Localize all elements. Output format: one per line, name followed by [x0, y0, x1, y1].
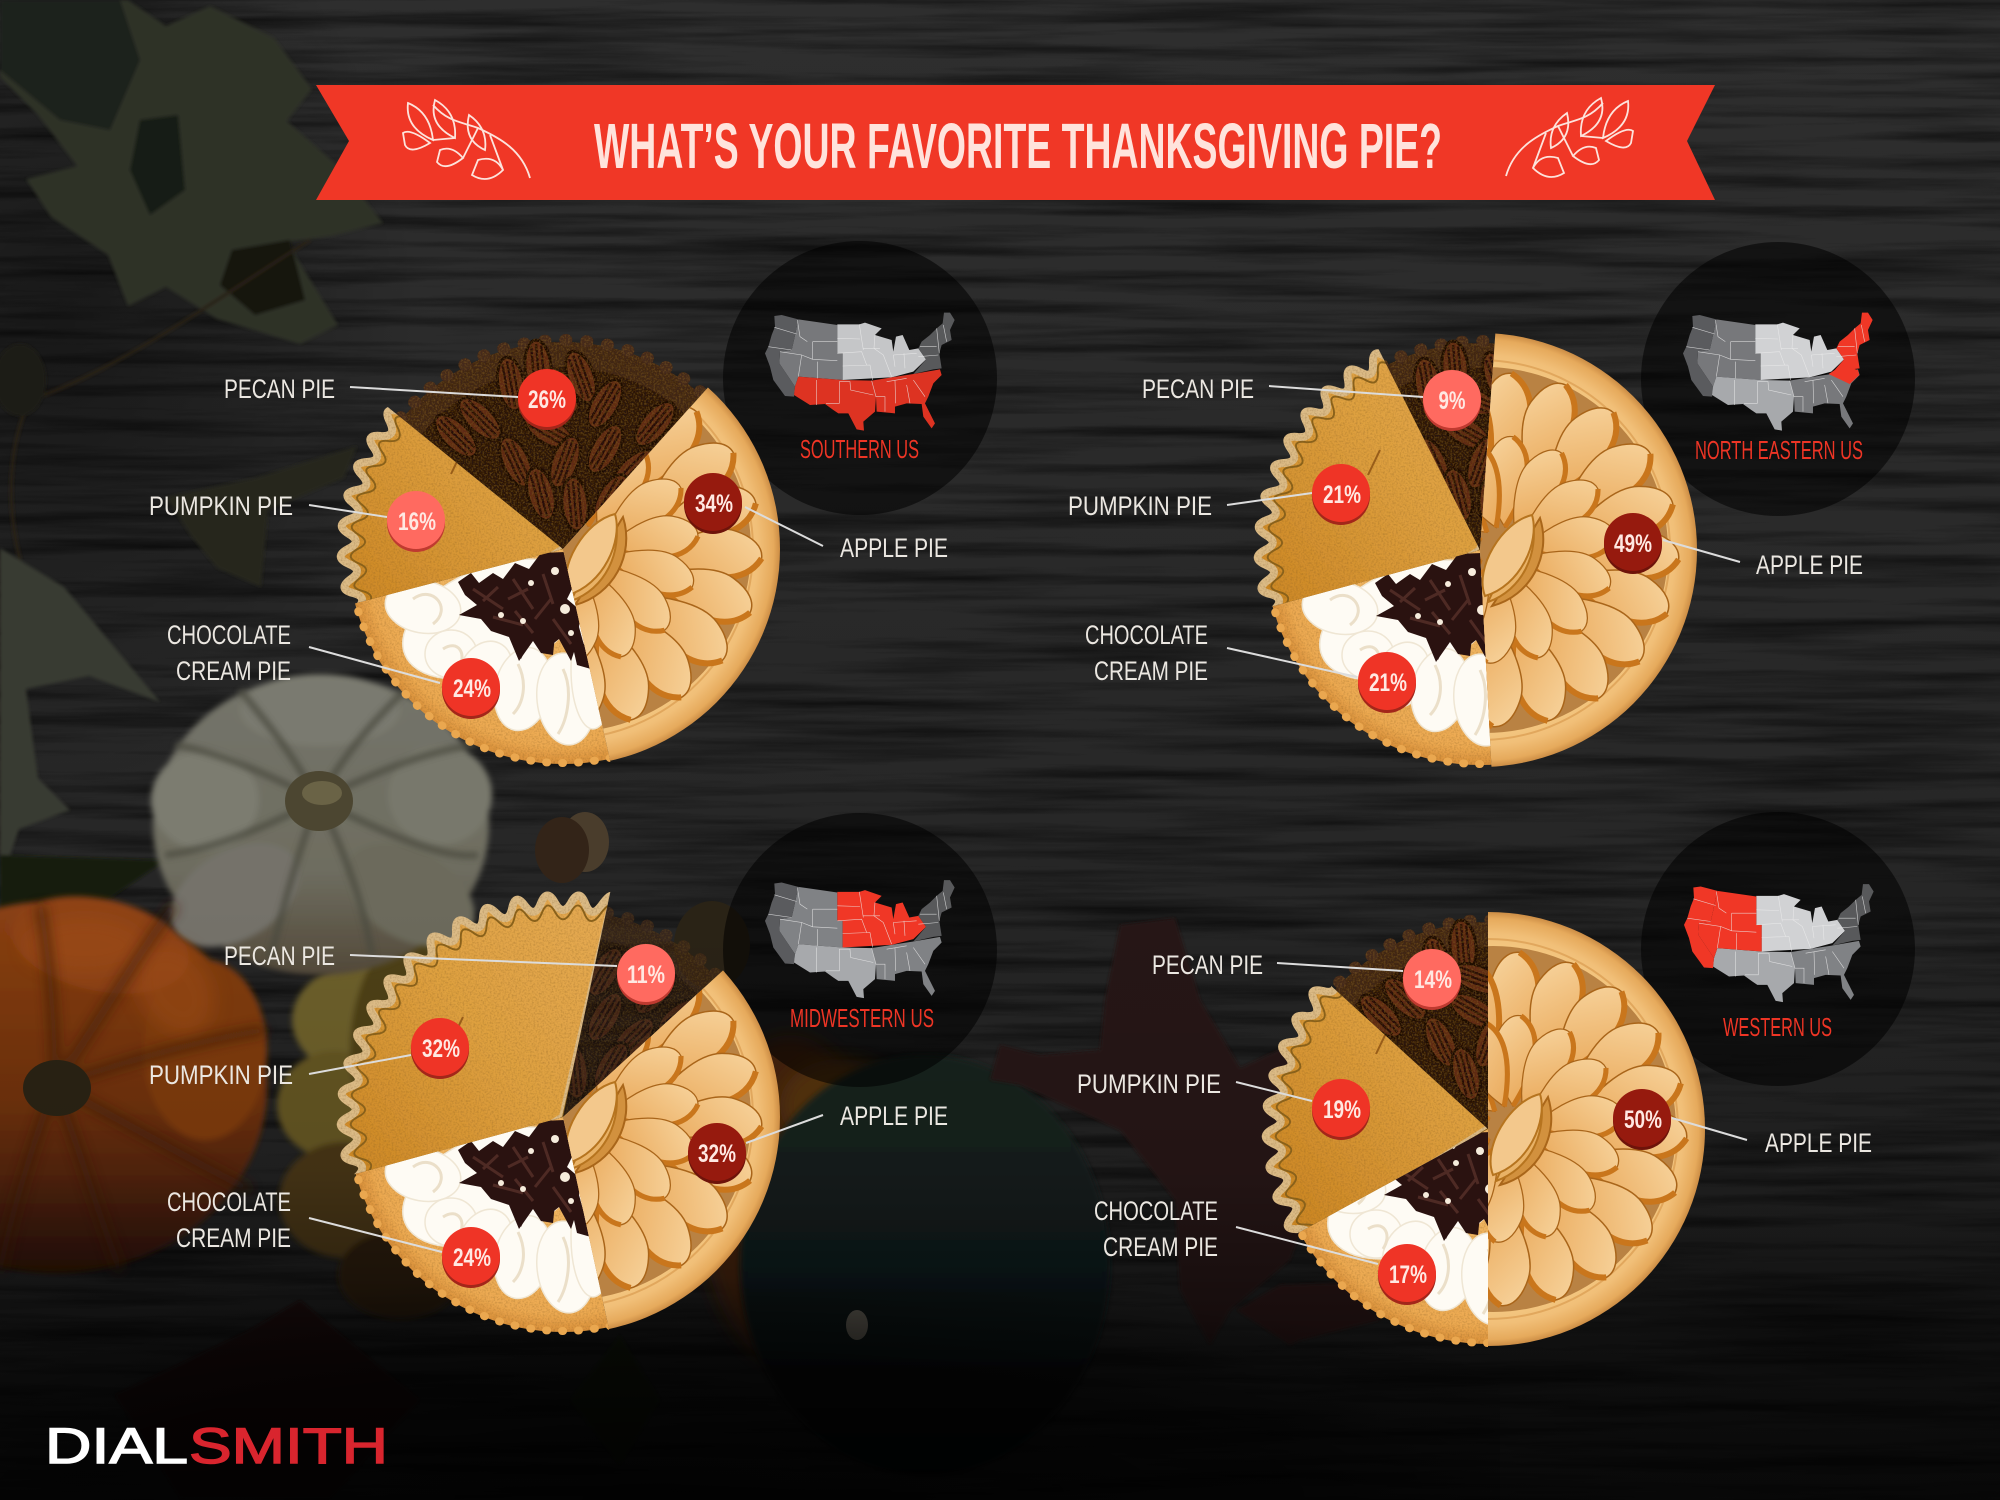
label: pumpkin pie 19%: 19%	[1323, 1096, 1361, 1124]
label: pumpkin pie 32%	[149, 1018, 469, 1090]
label: pumpkin pie 21%	[1068, 464, 1370, 525]
label: chocolate cream pie 17%: 17%	[1389, 1261, 1427, 1289]
label: chocolate cream pie 24%: CHOCOLATE	[167, 1187, 291, 1217]
pie chart: western US	[1266, 908, 1705, 1346]
label: pecan pie 9%	[1142, 370, 1481, 431]
label: apple pie 34%: 34%	[695, 490, 733, 518]
label: pecan pie 26%	[224, 369, 576, 430]
label: pecan pie 11%: PECAN PIE	[224, 941, 335, 971]
label: pecan pie 9%: 9%	[1438, 387, 1466, 415]
label: chocolate cream pie 24%	[167, 620, 500, 719]
label: pecan pie 14%: PECAN PIE	[1152, 950, 1263, 980]
pie chart: southern US	[341, 328, 780, 766]
decoration: orange pumpkin	[0, 881, 267, 1273]
decoration: yellow squash	[277, 930, 490, 1319]
logo: Dialsmith	[45, 1418, 388, 1474]
label: pecan pie 9%: PECAN PIE	[1142, 374, 1254, 404]
label: apple pie 49%: 49%	[1614, 530, 1652, 558]
decoration: acorn squash	[700, 1035, 1110, 1475]
label: pecan pie 14%: 14%	[1414, 966, 1452, 994]
map badge: southern US	[723, 241, 997, 515]
vignette: bottom fade	[0, 900, 2000, 1500]
label: apple pie 50%	[1613, 1089, 1872, 1158]
map badge: north eastern US	[1641, 242, 1915, 516]
map badge: north eastern US: NORTH EASTERN US	[1695, 435, 1863, 465]
title banner	[316, 85, 1715, 200]
label: apple pie 34%: APPLE PIE	[840, 533, 948, 563]
label: apple pie 32%: 32%	[698, 1140, 736, 1168]
decoration: dim gourd behind map	[674, 901, 750, 989]
decoration: white pumpkin	[151, 674, 493, 975]
label: chocolate cream pie 21%: CHOCOLATE	[1085, 620, 1208, 650]
label: pumpkin pie 32%: 32%	[422, 1035, 460, 1063]
map badge: western US	[1641, 812, 1915, 1086]
map badge: southern US: SOUTHERN US	[800, 434, 919, 464]
map badge: western US: WESTERN US	[1723, 1012, 1832, 1042]
label: chocolate cream pie 24%: 24%	[453, 675, 491, 703]
icon: right sprig	[1506, 98, 1633, 177]
map badge: midwestern US	[723, 813, 997, 1087]
label: pecan pie 11%	[224, 941, 675, 1005]
label: apple pie 50%: APPLE PIE	[1765, 1128, 1872, 1158]
label: pumpkin pie 16%	[149, 491, 445, 552]
label: chocolate cream pie 24%: 24%	[453, 1244, 491, 1272]
label: chocolate cream pie 17%: CREAM PIE	[1103, 1232, 1218, 1262]
map badge: midwestern US: MIDWESTERN US	[790, 1003, 934, 1033]
label: pumpkin pie 21%: PUMPKIN PIE	[1068, 491, 1212, 521]
logo: Dialsmith: SMITH	[189, 1418, 388, 1474]
decoration: acorn	[535, 812, 609, 883]
label: chocolate cream pie 24%: CHOCOLATE	[167, 620, 291, 650]
label: pecan pie 26%: PECAN PIE	[224, 374, 335, 404]
logo: Dialsmith: DIAL	[45, 1418, 188, 1474]
panel: midwestern US	[149, 813, 997, 1334]
label: chocolate cream pie 21%	[1085, 620, 1416, 713]
label: chocolate cream pie 24%: CREAM PIE	[176, 656, 291, 686]
panel: southern US	[149, 241, 997, 766]
label: chocolate cream pie 24%	[167, 1187, 500, 1288]
label: pumpkin pie 32%: PUMPKIN PIE	[149, 1060, 293, 1090]
label: pumpkin pie 19%	[1077, 1069, 1370, 1140]
label: pumpkin pie 16%: PUMPKIN PIE	[149, 491, 293, 521]
panel: north eastern US	[1068, 242, 1915, 767]
label: pecan pie 26%: 26%	[528, 386, 566, 414]
label: pumpkin pie 21%: 21%	[1323, 481, 1361, 509]
label: apple pie 49%: APPLE PIE	[1756, 550, 1863, 580]
label: apple pie 50%: 50%	[1624, 1106, 1662, 1134]
label: pecan pie 14%	[1152, 949, 1461, 1010]
pie chart: midwestern US	[341, 896, 780, 1334]
label: pecan pie 11%: 11%	[627, 961, 665, 989]
label: chocolate cream pie 21%: 21%	[1369, 669, 1407, 697]
label: apple pie 32%	[688, 1101, 948, 1184]
label: chocolate cream pie 17%	[1094, 1196, 1436, 1305]
icon: left sprig	[403, 100, 530, 179]
panel: western US	[1077, 812, 1915, 1346]
label: pumpkin pie 19%: PUMPKIN PIE	[1077, 1069, 1221, 1099]
decoration: autumn leaves top left	[0, 0, 383, 925]
label: chocolate cream pie 21%: CREAM PIE	[1094, 656, 1208, 686]
label: pumpkin pie 16%: 16%	[398, 508, 436, 536]
label: apple pie 32%: APPLE PIE	[840, 1101, 948, 1131]
label: chocolate cream pie 17%: CHOCOLATE	[1094, 1196, 1218, 1226]
label: apple pie 34%	[684, 473, 948, 563]
decoration: brown maple leaves	[269, 918, 1374, 1334]
label: chocolate cream pie 24%: CREAM PIE	[176, 1223, 291, 1253]
label: apple pie 49%	[1604, 513, 1863, 580]
pie chart: north eastern US	[1258, 328, 1697, 767]
